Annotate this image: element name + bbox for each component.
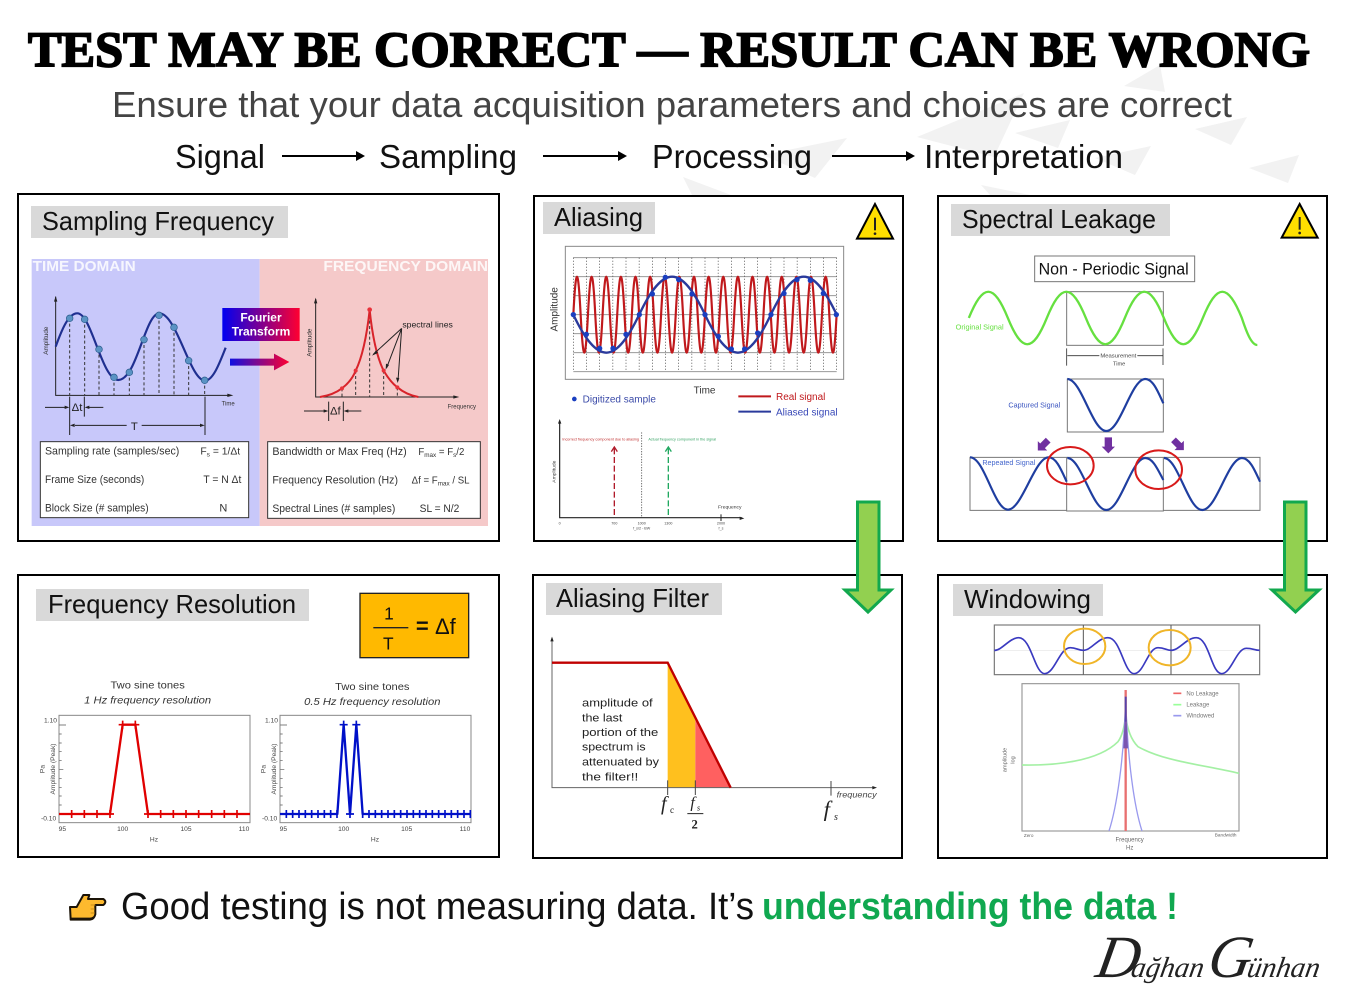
arrow: spectral leakage to windowing (1272, 502, 1319, 612)
chart: aliased frequency components: 2000 (717, 521, 725, 525)
panel: aliasing filter (533, 575, 902, 858)
text: filter note: the filter!! (582, 771, 638, 783)
text: filter note: portion of the (582, 727, 658, 739)
chart: real and aliased signal: Amplitude (550, 287, 561, 332)
table: time domain parameters: Sampling rate (samples/sec) (45, 446, 179, 458)
chart: real and aliased signal: Time (694, 385, 716, 396)
panel: sampling frequency (18, 194, 499, 541)
step: interpretation: Interpretation (924, 138, 1123, 175)
heading: frequency resolution: Frequency Resolution (48, 589, 296, 619)
table: time domain parameters: T = N Δt (203, 474, 241, 486)
frequency domain plot: Frequency (448, 404, 476, 410)
chart: leakage spectrum (1003, 684, 1239, 852)
table: frequency domain parameters: = F (436, 447, 453, 458)
chart: aliased frequency components: f_s (719, 526, 724, 530)
chart: 0.5 Hz frequency resolution: -0.10 (262, 816, 277, 823)
title: TEST MAY BE CORRECT — RESULT CAN BE WRONG (28, 21, 1310, 77)
icon: pointing hand (70, 895, 105, 920)
time domain plot: Δt (72, 402, 83, 414)
table: time domain parameters: = 1/Δt (210, 447, 240, 458)
time domain plot: T (131, 421, 138, 433)
axis labels: c (670, 806, 674, 816)
arrow: sampling to processing (543, 151, 627, 161)
axis labels (661, 790, 877, 831)
signature: G (1204, 924, 1259, 991)
diagram: original signal (956, 292, 1257, 367)
arrow: processing to interpretation (832, 151, 915, 161)
frequency domain plot: Δf (330, 405, 342, 417)
takeaway message: Good testing is not measuring data. It’s (121, 886, 754, 928)
label: non-periodic signal (1035, 256, 1195, 282)
chart: leakage spectrum: Zero (1024, 833, 1034, 838)
table: time domain parameters: N (219, 502, 227, 514)
chart: 1 Hz frequency resolution (40, 680, 250, 844)
chart: 1 Hz frequency resolution: 105 (180, 826, 192, 833)
heading: aliasing filter: Aliasing Filter (556, 583, 709, 613)
chart: leakage spectrum: Leakage (1186, 703, 1210, 709)
chart: leakage spectrum: No Leakage (1186, 691, 1219, 697)
chart: aliased frequency components: 1000 (638, 521, 646, 525)
axis labels: f (824, 796, 833, 821)
axis labels: s (834, 812, 838, 823)
diagram: time and frequency domain: FREQUENCY DOMAIN (323, 258, 488, 275)
panel: frequency resolution (18, 575, 499, 857)
heading: spectral leakage: Spectral Leakage (962, 204, 1156, 234)
takeaway message: understanding the data ! (762, 886, 1178, 928)
diagram: time and frequency domain: TIME DOMAIN (33, 258, 136, 275)
table: time domain parameters: s (207, 452, 211, 459)
chart: aliased frequency components (551, 419, 744, 530)
panel: windowing (938, 575, 1327, 858)
label: non-periodic signal: Non - Periodic Signal (1039, 260, 1189, 278)
table: time domain parameters (40, 442, 249, 518)
chart: leakage spectrum: log (1011, 756, 1017, 764)
chart: aliased frequency components: f_s/2 - BW (633, 526, 651, 530)
diagram: time and frequency domain (32, 258, 488, 526)
chart: aliased frequency components: Actual frequency component in the signal (648, 437, 716, 441)
chart: 0.5 Hz frequency resolution: Hz (371, 837, 379, 844)
chart: real and aliased signal (550, 246, 844, 396)
formula: 1/T = delta f: = (416, 614, 429, 639)
table: frequency domain parameters: SL = N/2 (420, 503, 459, 515)
table: frequency domain parameters: s (453, 452, 456, 459)
diagram: original signal: Original Signal (956, 324, 1004, 331)
panel: spectral leakage (938, 196, 1327, 541)
table: frequency domain parameters: Spectral Lines (# samples) (272, 503, 395, 515)
table: frequency domain parameters: max (424, 452, 437, 459)
takeaway message (121, 886, 1178, 928)
frequency domain plot: Amplitude (306, 328, 313, 357)
text: filter note (582, 698, 659, 783)
step: sampling: Sampling (379, 138, 517, 175)
table: frequency domain parameters: Δf = F (412, 476, 438, 487)
chart: 0.5 Hz frequency resolution: Pa (261, 765, 268, 773)
table: time domain parameters: Block Size (# samples) (45, 502, 149, 514)
legend: aliasing chart: Digitized sample (583, 395, 656, 406)
arrow: fourier transform (230, 354, 289, 370)
chart: 0.5 Hz frequency resolution: 110 (460, 826, 471, 833)
chart: leakage spectrum: Hz (1126, 846, 1133, 852)
chart: aliased frequency components: Amplitude (551, 460, 557, 483)
chart: 0.5 Hz frequency resolution: Two sine tones (335, 682, 409, 693)
arrow: signal to sampling (282, 151, 365, 161)
chart: 1 Hz frequency resolution: Two sine tones (110, 680, 185, 691)
chart: windowed signal (994, 625, 1260, 675)
step: processing: Processing (652, 138, 812, 175)
chart: 1 Hz frequency resolution: 1 Hz frequency resolution (84, 695, 211, 706)
axis labels: f (661, 793, 669, 815)
axis labels: s (697, 804, 700, 813)
axis labels: frequency (837, 790, 877, 800)
formula: 1/T = delta f: 1 (384, 604, 394, 624)
diagram: captured signal (1008, 379, 1163, 432)
icon: purple arrows (1033, 435, 1189, 455)
table: frequency domain parameters: max (438, 481, 451, 488)
text: filter note: amplitude of (582, 698, 654, 710)
table: time domain parameters: Frame Size (seconds) (45, 474, 144, 486)
diagram: original signal: Time (1113, 361, 1125, 367)
chart: 1 Hz frequency resolution: 95 (59, 826, 66, 833)
time domain plot: Amplitude (43, 326, 50, 355)
diagram: original signal: Measurement (1100, 353, 1137, 359)
chart: aliased frequency components: Incorrect frequency component due to aliasing (562, 437, 639, 441)
legend: aliasing chart (572, 392, 838, 419)
chart: leakage spectrum: Frequency (1116, 837, 1144, 843)
step: signal: Signal (175, 138, 265, 175)
fourier transform label (222, 308, 300, 341)
chart: 0.5 Hz frequency resolution: 95 (280, 826, 287, 833)
panel: aliasing (534, 196, 903, 541)
table: time domain parameters: F (200, 447, 207, 458)
table: frequency domain parameters: / SL (450, 476, 470, 487)
icon: warning (857, 204, 893, 239)
legend: aliasing chart: Real signal (776, 392, 825, 403)
chart: 0.5 Hz frequency resolution: 105 (401, 826, 413, 833)
heading: aliasing: Aliasing (554, 202, 643, 232)
chart: filter response (550, 637, 877, 831)
chart: leakage spectrum: Bandwidth (1215, 832, 1237, 837)
fourier transform label: Fourier (240, 311, 282, 325)
icon: warning (1282, 204, 1318, 238)
diagram: repeated signal (970, 447, 1260, 511)
axis labels: 2 (692, 817, 698, 831)
chart: 1 Hz frequency resolution: 100 (117, 826, 129, 833)
chart: 0.5 Hz frequency resolution: 1.10 (265, 718, 278, 725)
chart: 0.5 Hz frequency resolution: 0.5 Hz frequency resolution (304, 697, 441, 708)
formula: 1/T = delta f (360, 593, 469, 658)
formula: 1/T = delta f: Δf (435, 614, 457, 639)
frequency domain plot (304, 298, 476, 421)
diagram: repeated signal: Repeated Signal (982, 458, 1036, 467)
arrow: aliasing to aliasing filter (845, 502, 891, 612)
chart: aliased frequency components: 1300 (664, 521, 672, 525)
chart: 0.5 Hz frequency resolution: Amplitude (Peak) (271, 743, 278, 795)
heading: windowing: Windowing (964, 584, 1091, 614)
chart: 1 Hz frequency resolution: Pa (40, 765, 47, 773)
subtitle: Ensure that your data acquisition parameters and choices are correct (112, 84, 1232, 125)
chart: aliased frequency components: 0 (559, 521, 561, 525)
table: frequency domain parameters: Bandwidth or Max Freq (Hz) (272, 446, 407, 458)
chart: 1 Hz frequency resolution: Amplitude (Peak) (50, 743, 57, 795)
chart: aliased frequency components: Frequency (718, 504, 742, 510)
workflow steps (175, 138, 1123, 175)
text: filter note: attenuated by (582, 757, 659, 769)
table: frequency domain parameters: Frequency Resolution (Hz) (272, 475, 398, 487)
signature: ağhan (1129, 952, 1207, 984)
table: frequency domain parameters: F (418, 447, 424, 458)
time domain plot: Time (222, 402, 235, 408)
heading: sampling frequency: Sampling Frequency (42, 206, 274, 236)
fourier transform label: Transform (232, 325, 290, 339)
text: filter note: spectrum is (582, 742, 646, 754)
chart: leakage spectrum: amplitude (1003, 748, 1009, 772)
chart: leakage spectrum: Windowed (1186, 714, 1214, 720)
signature: D (1091, 924, 1147, 991)
chart: 1 Hz frequency resolution: 110 (239, 826, 250, 833)
diagram: captured signal: Captured Signal (1008, 401, 1061, 410)
text: filter note: the last (582, 713, 623, 725)
table: frequency domain parameters: /2 (456, 447, 464, 458)
time domain plot (43, 296, 235, 435)
formula: 1/T = delta f: T (383, 634, 394, 654)
chart: 0.5 Hz frequency resolution: 100 (338, 826, 350, 833)
table: frequency domain parameters (268, 442, 480, 518)
signature: ünhan (1245, 952, 1323, 984)
chart: aliased frequency components: 700 (611, 521, 617, 525)
chart: 1 Hz frequency resolution: 1.10 (44, 718, 57, 725)
chart: 0.5 Hz frequency resolution (261, 682, 471, 844)
chart: 1 Hz frequency resolution: Hz (150, 837, 158, 844)
axis labels: f (690, 794, 697, 811)
legend: aliasing chart: Aliased signal (776, 408, 838, 419)
chart: 1 Hz frequency resolution: -0.10 (41, 816, 56, 823)
frequency domain plot: spectral lines (402, 320, 454, 330)
